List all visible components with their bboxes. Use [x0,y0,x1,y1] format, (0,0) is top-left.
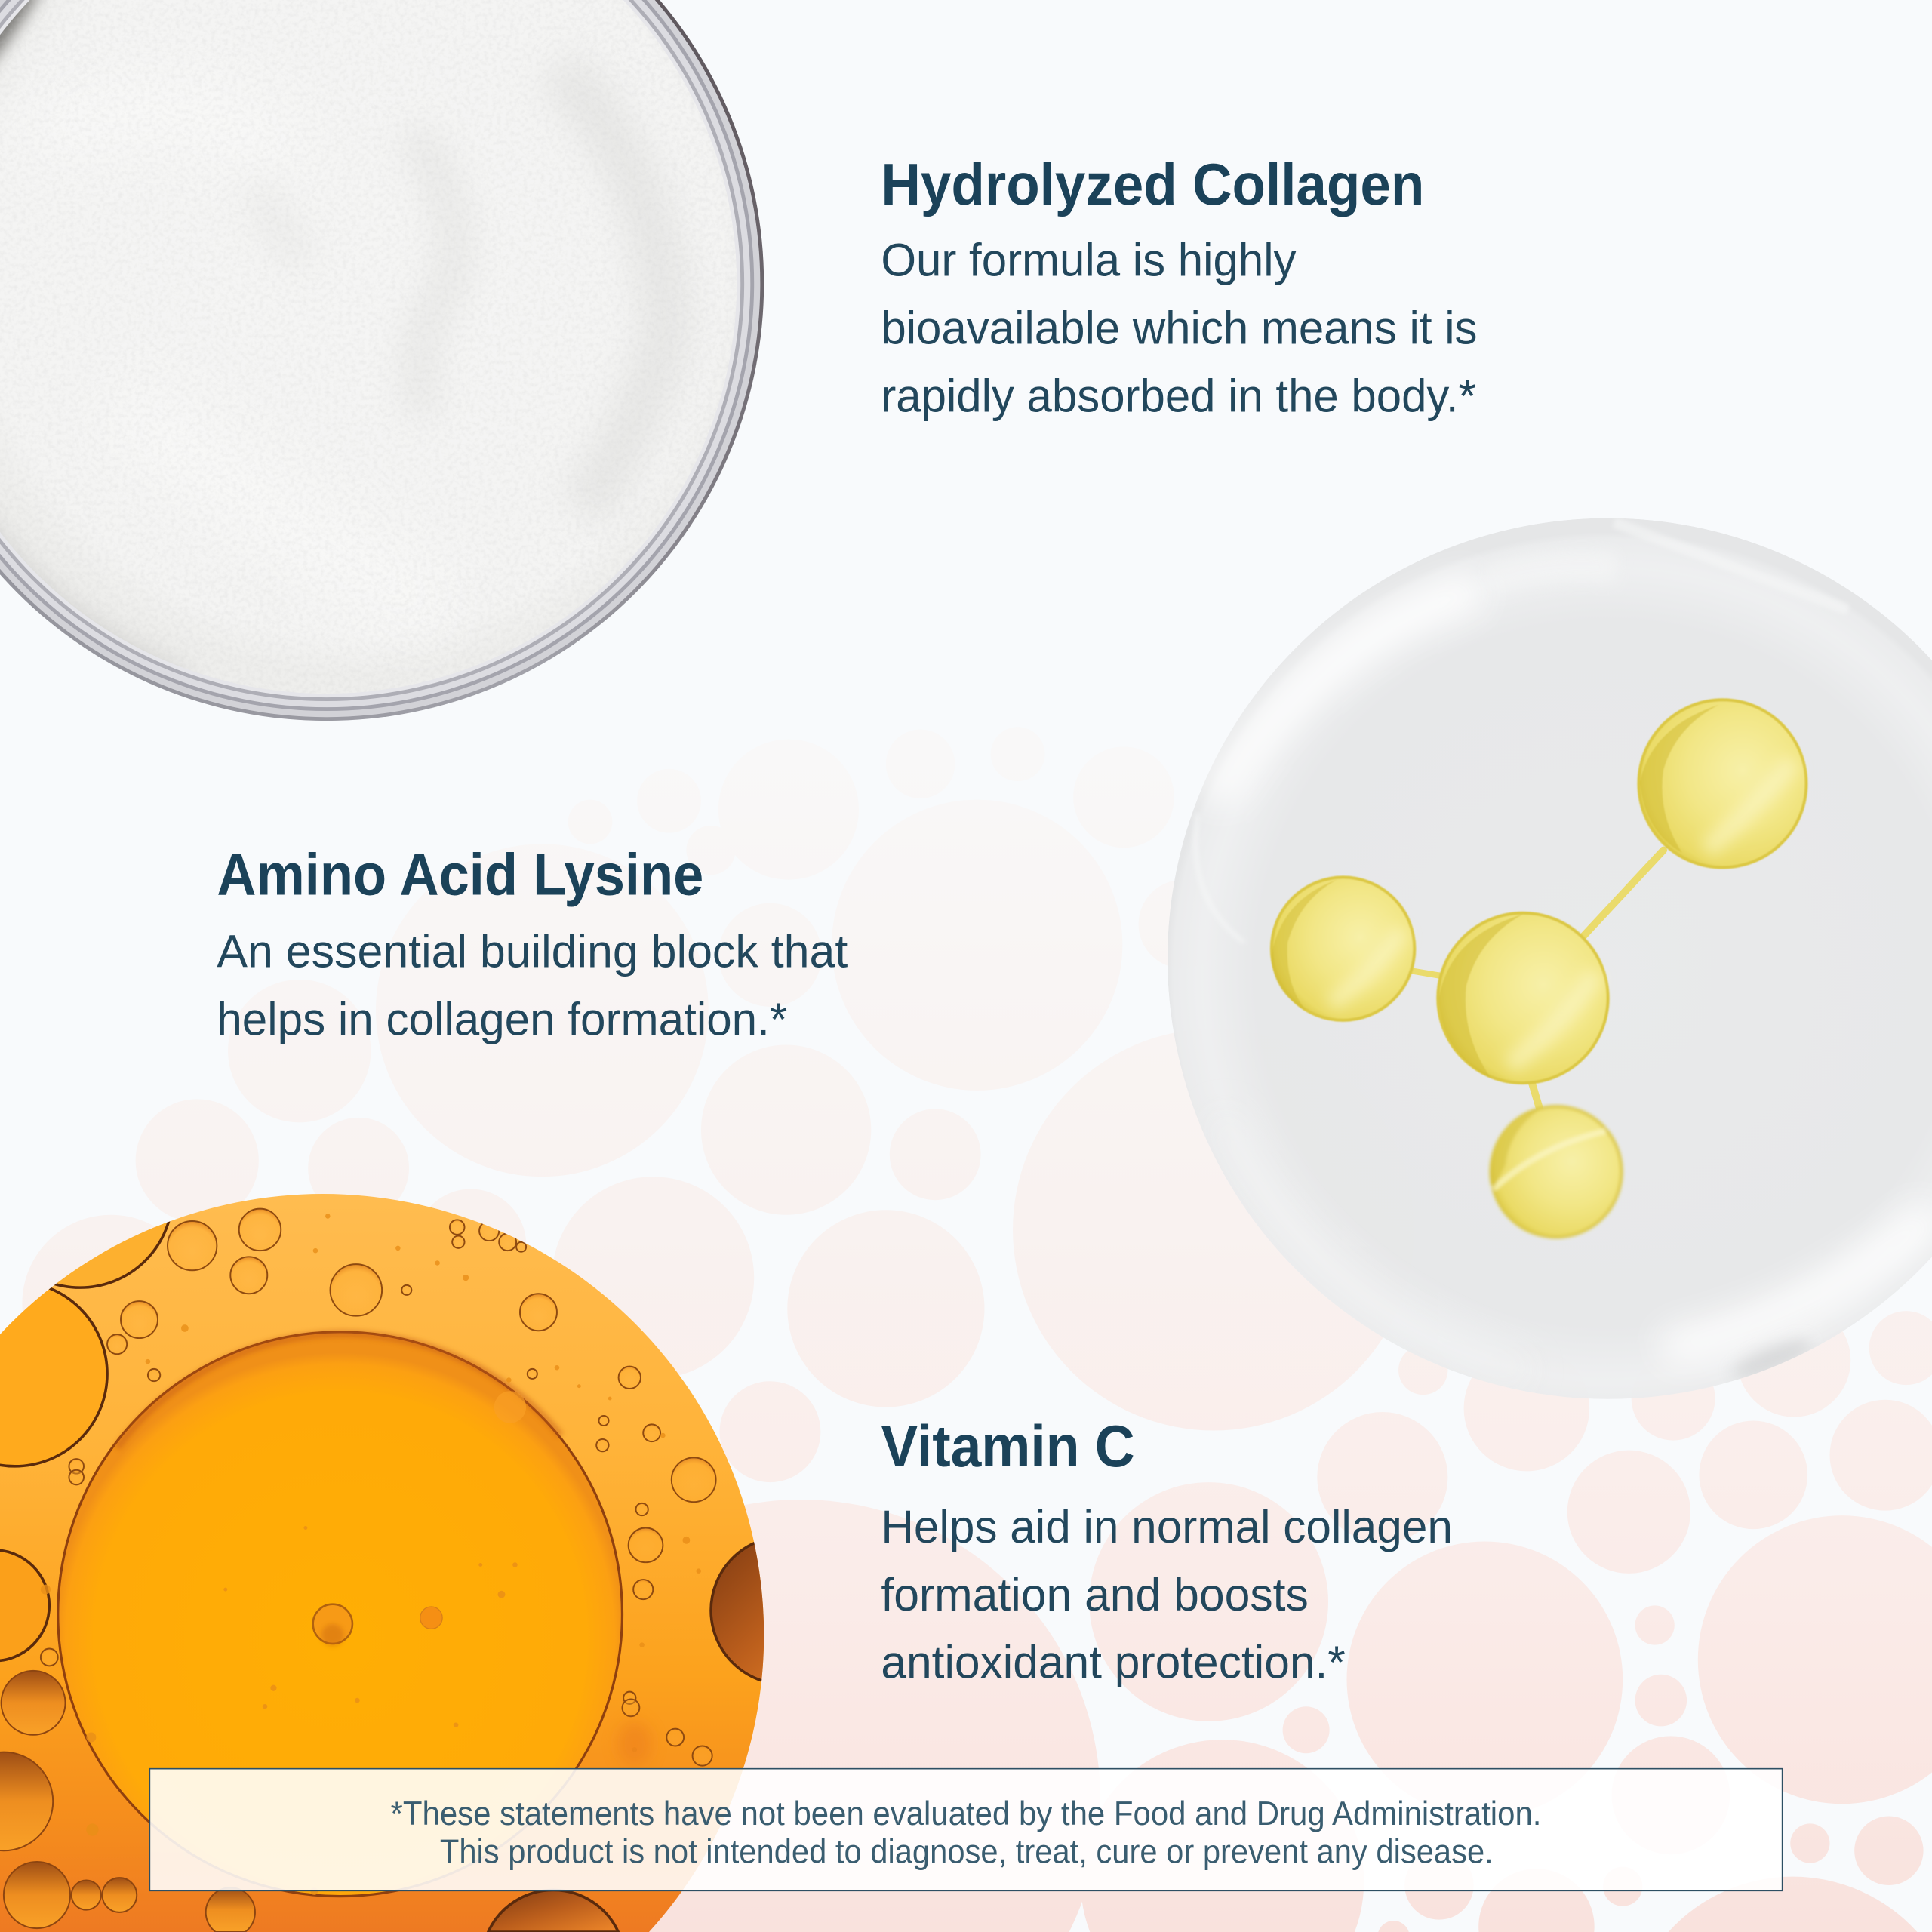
body [881,235,1478,421]
molecule sphere: left [1272,877,1414,1020]
body: rapidly absorbed in the body.* [881,370,1476,421]
body [881,1501,1453,1688]
FDA disclaimer box: *These statements have not been evaluated by the Food and Drug Administration. [391,1795,1541,1832]
image: orange oil bubbles [0,1194,764,1932]
tin rim [0,0,764,721]
Vitamin C text block [881,1414,1453,1688]
body: antioxidant protection.* [881,1637,1346,1688]
heading: Vitamin C [881,1414,1135,1479]
image: collagen powder in tin [0,0,764,752]
FDA disclaimer box [149,1769,1783,1890]
body: An essential building block that [217,926,848,977]
background bubble pattern [22,727,1932,1932]
warm glow spot [617,1721,652,1766]
glass bubble [1168,518,1932,1399]
body: helps in collagen formation.* [217,993,787,1044]
powder surface [0,0,737,752]
oil base [0,1183,789,1932]
molecule sphere: bottom [1491,1106,1622,1237]
image: glass bubble with molecule [1168,518,1932,1399]
Hydrolyzed Collagen text block [881,152,1478,421]
body: Helps aid in normal collagen [881,1501,1453,1552]
large central oil droplet [58,1332,622,1897]
heading: Amino Acid Lysine [217,842,703,907]
body: bioavailable which means it is [881,303,1478,354]
mid droplets [0,1671,255,1932]
edge droplets [0,1221,764,1932]
molecule sphere: top right [1638,700,1806,867]
body: formation and boosts [881,1569,1309,1620]
body: Our formula is highly [881,235,1297,286]
heading: Hydrolyzed Collagen [881,152,1424,217]
FDA disclaimer box: This product is not intended to diagnose, treat, cure or prevent any disease. [440,1834,1494,1871]
small ring droplets [41,1209,716,1766]
molecule bonds [1412,851,1663,1118]
Amino Acid Lysine text block [217,842,848,1044]
tiny oil specks [41,1214,701,1895]
molecule sphere: centre [1438,913,1608,1083]
body [217,926,848,1044]
